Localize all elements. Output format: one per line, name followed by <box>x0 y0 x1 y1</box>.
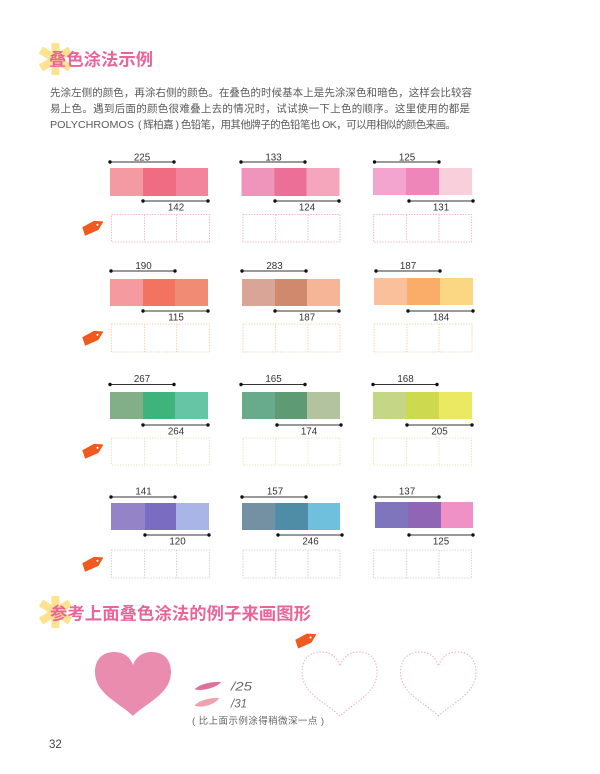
example 225 + 142: 142 <box>168 202 184 214</box>
example 283 + 187: 187 <box>299 312 315 324</box>
example 165 + 174: 165 <box>265 374 282 385</box>
example 157 + 246: 157 <box>267 486 283 498</box>
example 133 + 124: 133 <box>265 152 282 164</box>
intro paragraph: 先涂左侧的颜色，再涂右侧的颜色。在叠色的时候基本上是先涂深色和暗色，这样会比较容 <box>50 86 472 99</box>
icon: orange pencil tag <box>83 332 102 345</box>
example 283 + 187 <box>240 261 341 352</box>
example 187 + 184 <box>374 261 475 352</box>
icon: yellow asterisk <box>41 596 70 628</box>
example 190 + 115 <box>109 261 210 352</box>
intro paragraph: POLYCHROMOS <box>50 119 134 131</box>
example 267 + 264: 267 <box>134 374 150 385</box>
example 165 + 174 <box>239 374 343 465</box>
page number: 32 <box>49 739 62 751</box>
colored pencil heart example <box>95 652 171 716</box>
icon: yellow asterisk <box>41 43 70 75</box>
row 4 <box>83 486 475 578</box>
row 3 <box>83 374 474 465</box>
icon: orange pencil tag <box>296 634 316 648</box>
row 1 <box>83 152 475 242</box>
example 267 + 264: 264 <box>168 426 185 438</box>
example 168 + 205 <box>371 374 474 465</box>
example 125 + 131: 131 <box>433 202 449 214</box>
example 137 + 125: 137 <box>399 486 415 498</box>
example 190 + 115: 115 <box>168 312 184 324</box>
row 2 <box>83 261 475 352</box>
pencil strokes and color numbers: /25 <box>230 680 252 694</box>
example 168 + 205: 205 <box>431 426 448 438</box>
dotted heart outline right <box>400 652 476 716</box>
example 141 + 120: 120 <box>169 536 186 548</box>
intro paragraph: ( 辉柏嘉 ) 色铅笔，用其他牌子的色铅笔也 OK，可以用相似的颜色来画。 <box>138 118 456 131</box>
example 137 + 125 <box>373 486 475 578</box>
title text: 叠色涂法示例 <box>49 50 153 70</box>
intro paragraph <box>50 86 472 131</box>
example 137 + 125: 125 <box>433 536 450 548</box>
example 267 + 264 <box>108 374 210 465</box>
example 190 + 115: 190 <box>135 261 152 272</box>
example 187 + 184: 184 <box>433 312 450 324</box>
example 187 + 184: 187 <box>400 261 416 272</box>
icon: orange pencil tag <box>83 558 102 571</box>
example 125 + 131 <box>373 152 475 242</box>
example 157 + 246: 246 <box>302 536 319 548</box>
intro paragraph: 易上色。遇到后面的颜色很难叠上去的情况时，试试换一下上色的顺序。这里使用的都是 <box>50 102 470 115</box>
example 141 + 120: 141 <box>135 486 152 498</box>
heading: 参考上面叠色涂法的例子来画图形 <box>41 596 311 628</box>
example 165 + 174: 174 <box>301 426 318 438</box>
example 157 + 246 <box>240 486 344 578</box>
note: ( 比上面示例涂得稍微深一点 ) <box>192 715 324 727</box>
example 168 + 205: 168 <box>397 374 414 385</box>
pencil strokes and color numbers <box>195 680 252 710</box>
example 125 + 131: 125 <box>399 152 416 164</box>
title text: 参考上面叠色涂法的例子来画图形 <box>50 604 311 624</box>
example 133 + 124: 124 <box>299 202 316 214</box>
icon: orange pencil tag <box>83 222 102 235</box>
dotted heart outline left <box>302 652 377 716</box>
heading: 叠色涂法示例 <box>41 43 153 75</box>
example 283 + 187: 283 <box>266 261 283 272</box>
example 225 + 142 <box>108 152 210 242</box>
example 225 + 142: 225 <box>134 152 151 164</box>
icon: orange pencil tag <box>83 444 102 458</box>
example 133 + 124 <box>239 152 341 242</box>
pencil strokes and color numbers: /31 <box>230 696 247 710</box>
example 141 + 120 <box>109 486 211 578</box>
